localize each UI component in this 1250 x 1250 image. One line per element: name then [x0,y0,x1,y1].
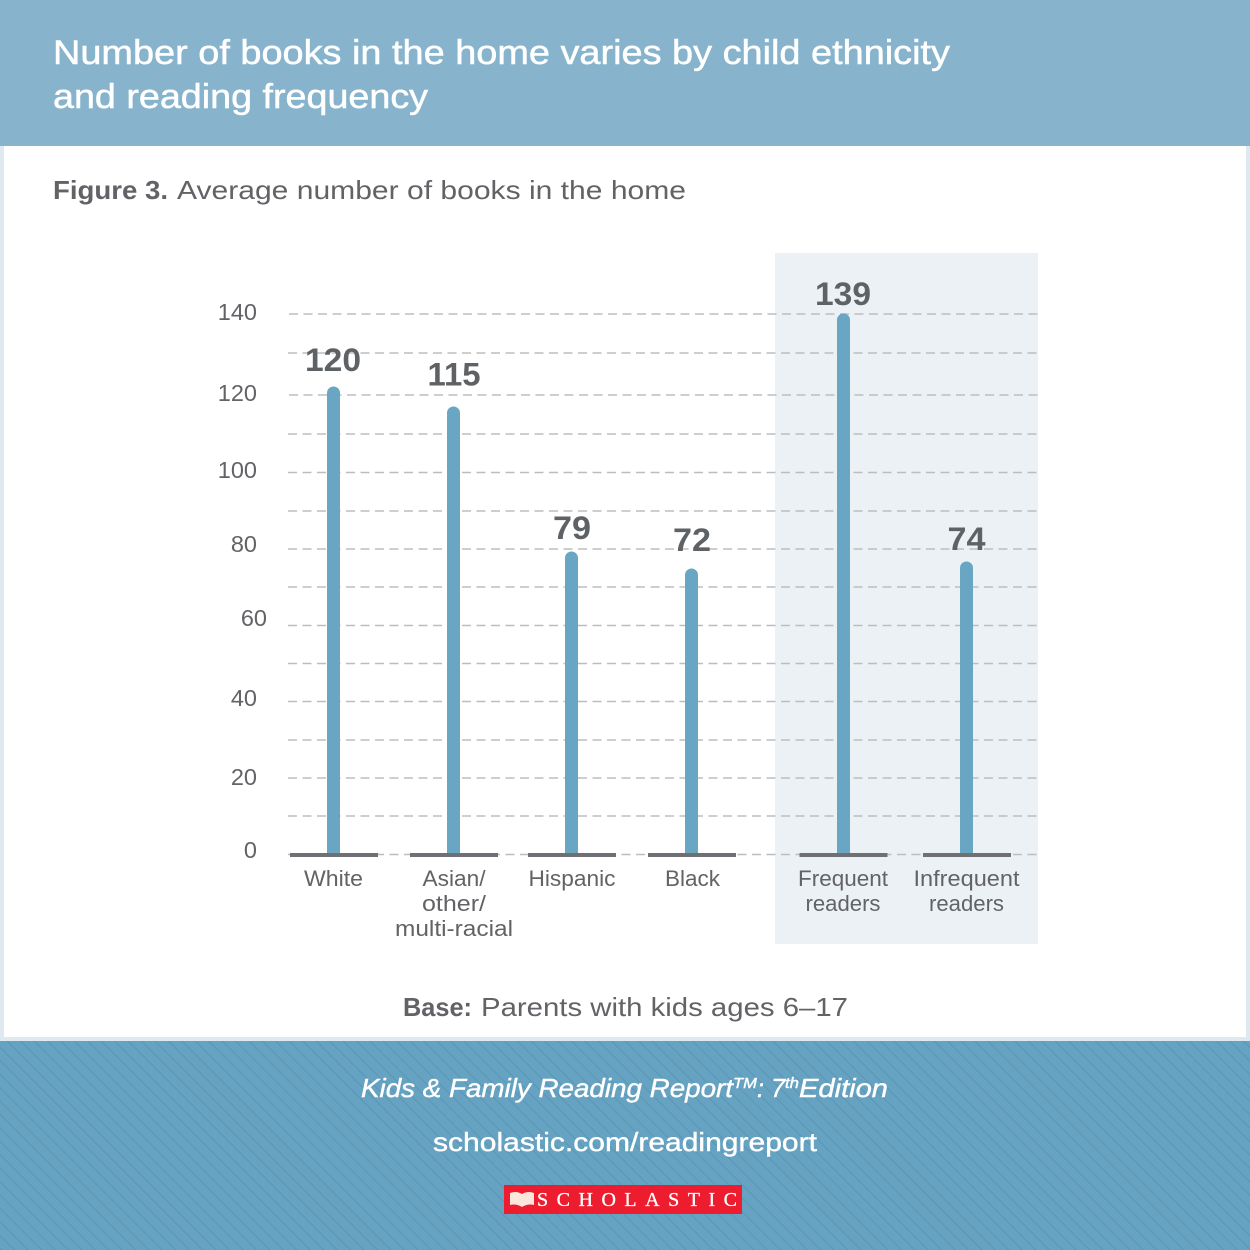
bar: Asian/other/multi-racial 115 [395,356,513,941]
figure heading: Figure 3. [53,175,168,205]
icon: open book [510,1192,534,1207]
bar: White 120 [290,342,378,891]
footer band [0,1041,1250,1250]
bar: Infrequent readers 74: Infrequent [914,866,1020,891]
title [53,34,950,116]
bar: Black 72: 72 [673,522,711,558]
base note: Parents with kids ages 6–17 [481,992,848,1022]
report url: scholastic.com/readingreport [433,1127,818,1157]
bar: Black 72 [648,522,736,891]
bar: Asian/other/multi-racial 115: multi-racial [395,916,513,941]
bar: Infrequent readers 74: 74 [948,521,986,557]
bar: Black 72: Black [665,866,721,891]
bar: White 120: 120 [305,342,361,378]
report title: : 7 [757,1073,786,1103]
y axis labels [218,299,267,863]
bar: Infrequent readers 74: readers [929,891,1004,916]
chart gridlines [288,314,1038,854]
bar: Hispanic 79: 79 [553,510,591,546]
report title [361,1073,888,1103]
y axis labels: 80 [231,531,257,557]
bar: Asian/other/multi-racial 115: Asian/ [422,866,486,891]
bar: Frequent readers 139: readers [806,891,880,916]
header band [0,0,1250,146]
report title: Edition [799,1073,888,1103]
bar: Hispanic 79: Hispanic [528,866,616,891]
title: Number of books in the home varies by child ethnicity [53,34,950,72]
y axis labels: 0 [244,837,257,863]
title: and reading frequency [53,78,428,116]
bar: Hispanic 79 [528,510,616,891]
scholastic logo [504,1185,742,1214]
bar: Frequent readers 139 [798,276,889,916]
report title: TM [733,1075,758,1092]
bar: Asian/other/multi-racial 115: other/ [422,891,487,916]
figure heading [53,175,686,205]
y axis labels: 40 [231,685,257,711]
report title: Kids & Family Reading Report [361,1073,735,1103]
y axis labels: 120 [218,380,257,406]
y axis labels: 100 [218,457,257,483]
panel: white content area [4,146,1246,1037]
scholastic logo: SCHOLASTIC [537,1189,737,1211]
panel: reader frequency highlight [775,253,1038,944]
report title: th [785,1075,799,1092]
bar: Frequent readers 139: Frequent [798,866,889,891]
y axis labels: 20 [231,764,257,790]
bar: Asian/other/multi-racial 115: 115 [428,356,480,392]
figure heading: Average number of books in the home [177,175,686,205]
bar: Infrequent readers 74 [914,521,1020,916]
base note: Base: [403,992,472,1022]
y axis labels: 60 [241,605,267,631]
bar: Frequent readers 139: 139 [815,276,871,312]
y axis labels: 140 [218,299,257,325]
bar: White 120: White [304,866,363,891]
